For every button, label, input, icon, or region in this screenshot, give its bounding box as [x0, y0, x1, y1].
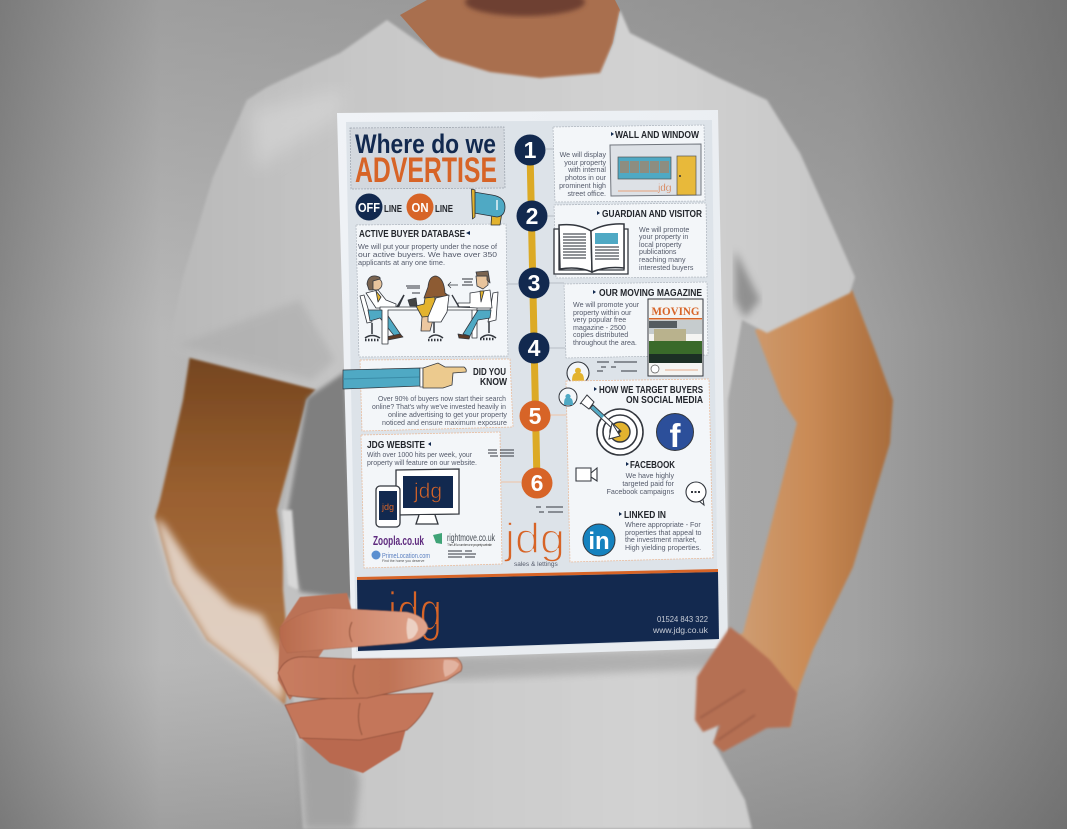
- right man: [452, 271, 498, 339]
- footer band: www.jdg.co.uk: [652, 625, 709, 635]
- panel: wall and window: your property: [564, 159, 606, 167]
- panel: did you know: KNOW: [480, 376, 507, 388]
- panel: wall and window: WALL AND WINDOW: [615, 129, 699, 141]
- icon: person small: [559, 388, 577, 406]
- left arm: [155, 355, 317, 705]
- neck: [400, 0, 620, 84]
- panel: active buyer database: ACTIVE BUYER DATABASE: [359, 228, 465, 240]
- flyer sheet: [337, 110, 728, 660]
- timeline: [500, 134, 566, 498]
- step 2: 2: [526, 203, 538, 229]
- step 4: 4: [528, 335, 541, 361]
- icon: linkedin: in: [588, 528, 610, 555]
- title: Where do we: [355, 129, 496, 159]
- icon: target and arrow: [580, 395, 643, 455]
- panel: jdg website: Find the home you deserve: [382, 559, 424, 563]
- jdg logo small: sales & lettings: [514, 561, 558, 568]
- panel: how we target buyers on social media: High yielding properties.: [625, 544, 701, 552]
- panel: did you know: online? That's why we've invested heavily in: [372, 403, 506, 411]
- panel: how we target buyers on social media: [559, 379, 713, 562]
- left man: [360, 276, 404, 340]
- off line / on line: ON: [412, 200, 428, 215]
- panel: guardian and visitor: interested buyers: [639, 264, 694, 272]
- panel: wall and window: with internal: [567, 166, 606, 174]
- panel: how we target buyers on social media: Facebook campaigns: [607, 488, 674, 496]
- photo: man in t-shirt: [155, 0, 893, 829]
- icon: video camera: [576, 468, 597, 481]
- footer band: 01524 843 322: [657, 614, 708, 624]
- panel: guardian and visitor: reaching many: [639, 256, 686, 264]
- icon: chat bubble: [686, 482, 706, 505]
- table: [380, 307, 477, 344]
- left hand holding flyer: [278, 593, 462, 773]
- paper shadow: [352, 648, 728, 680]
- panel: wall and window: We will display: [560, 151, 606, 159]
- panel: wall and window: [553, 125, 705, 202]
- woman: [406, 276, 449, 340]
- icon: monitor and phone: jdg: [413, 480, 442, 503]
- panel: jdg website: JDG WEBSITE: [367, 439, 425, 451]
- step 1: 1: [524, 137, 537, 163]
- panel: how we target buyers on social media: Where appropriate - For: [625, 521, 701, 529]
- panel: guardian and visitor: [554, 203, 707, 278]
- thumb: [280, 608, 428, 653]
- panel: how we target buyers on social media: LINKED IN: [624, 509, 666, 521]
- panel: our moving magazine: OUR MOVING MAGAZINE: [599, 287, 702, 299]
- panel: how we target buyers on social media: HOW WE TARGET BUYERS: [599, 384, 703, 396]
- footer band: [357, 569, 719, 651]
- icon: megaphone: [472, 189, 505, 225]
- title: ADVERTISE: [355, 151, 497, 190]
- icon: facebook: f: [670, 417, 682, 454]
- panel: wall and window: photos in our: [565, 174, 607, 182]
- second finger: [285, 693, 433, 740]
- panel: guardian and visitor: publications: [639, 248, 677, 256]
- panel: jdg website: [361, 432, 502, 568]
- panel: jdg website: rightmove.co.uk: [447, 533, 496, 544]
- panel: jdg website: The UK's number one property website: [447, 543, 492, 547]
- magazine cover: [648, 299, 703, 376]
- off line / on line: OFF: [358, 200, 380, 215]
- thumbnail: [406, 618, 418, 639]
- first finger: [278, 657, 462, 699]
- shirt folds: [178, 90, 760, 829]
- panel: active buyer database: applicants at any one time.: [358, 259, 445, 267]
- panel: did you know: online advertising to get your property: [388, 411, 507, 419]
- panel: active buyer database: [356, 224, 508, 357]
- icon: monitor and phone: jdg: [381, 502, 394, 512]
- jdg logo small: jdg: [503, 515, 565, 563]
- step 5: 5: [529, 403, 542, 429]
- icon: person and lines: [567, 362, 637, 384]
- off line / on line: [356, 194, 453, 220]
- panel: guardian and visitor: your property in: [639, 233, 688, 241]
- panel: guardian and visitor: We will promote: [639, 226, 689, 234]
- step 3: [518, 268, 550, 298]
- panel: jdg website: With over 1000 hits per week, your: [367, 451, 473, 459]
- right hand: [695, 627, 797, 752]
- illustration: shop front: [610, 144, 701, 196]
- arrow and note: [448, 279, 473, 288]
- panel: did you know: Over 90% of buyers now start their search: [378, 395, 506, 403]
- panel: wall and window: prominent high: [559, 182, 606, 190]
- panel: did you know: [343, 359, 513, 431]
- panel: guardian and visitor: GUARDIAN AND VISITOR: [602, 208, 702, 220]
- panel: active buyer database: our active buyers. We have over 350: [358, 251, 497, 259]
- panel: how we target buyers on social media: We have highly: [626, 472, 674, 480]
- panel: how we target buyers on social media: ON SOCIAL MEDIA: [626, 394, 703, 406]
- footer band: jdg: [387, 580, 442, 642]
- magazine cover: MOVING: [652, 304, 700, 318]
- third finger: [300, 725, 407, 773]
- title: [350, 127, 505, 190]
- panel: did you know: noticed and ensure maximum exposure: [382, 419, 507, 427]
- panel: how we target buyers on social media: the investment market,: [625, 536, 697, 544]
- step 1: [514, 134, 546, 166]
- icon: monitor and phone: [376, 469, 459, 527]
- panel: how we target buyers on social media: targeted paid for: [622, 480, 675, 488]
- panel: our moving magazine: property within our: [573, 309, 632, 317]
- panel: our moving magazine: We will promote your: [573, 301, 640, 309]
- icon: linkedin: [583, 524, 615, 556]
- panel: our moving magazine: very popular free: [573, 316, 626, 324]
- panel: guardian and visitor: local property: [639, 241, 682, 249]
- panel: how we target buyers on social media: FACEBOOK: [630, 459, 675, 471]
- panel: our moving magazine: [564, 282, 708, 376]
- panel: our moving magazine: throughout the area.: [573, 339, 637, 347]
- panel: jdg website: property will feature on our website.: [367, 459, 477, 467]
- off line / on line: LINE: [435, 203, 453, 215]
- step 5: [520, 400, 550, 432]
- panel: jdg website: PrimeLocation.com: [382, 551, 430, 560]
- panel: our moving magazine: magazine - 2500: [573, 324, 626, 332]
- shirt: [167, 10, 855, 829]
- off line / on line: LINE: [384, 203, 402, 215]
- step 3: 3: [528, 270, 540, 296]
- step 6: 6: [531, 470, 543, 496]
- panel: our moving magazine: copies distributed: [573, 331, 628, 339]
- panel: jdg website: Zoopla.co.uk: [373, 533, 424, 548]
- right arm: [730, 290, 893, 727]
- panel: active buyer database: We will put your property under the nose of: [358, 243, 497, 251]
- step 6: [522, 468, 552, 498]
- panel: wall and window: street office.: [567, 190, 606, 198]
- panel: did you know: DID YOU: [473, 366, 506, 378]
- icon: facebook: [656, 414, 694, 454]
- icon: open book: [554, 224, 628, 274]
- dash marks: [488, 450, 514, 456]
- back of hand: [278, 593, 352, 700]
- step 2: [516, 200, 548, 232]
- arm and pointing hand: [343, 363, 466, 389]
- illustration: meeting: [360, 271, 498, 344]
- step 4: [518, 332, 550, 364]
- panel: how we target buyers on social media: properties that appeal to: [625, 529, 702, 537]
- illustration: shop front: jdg: [657, 183, 671, 194]
